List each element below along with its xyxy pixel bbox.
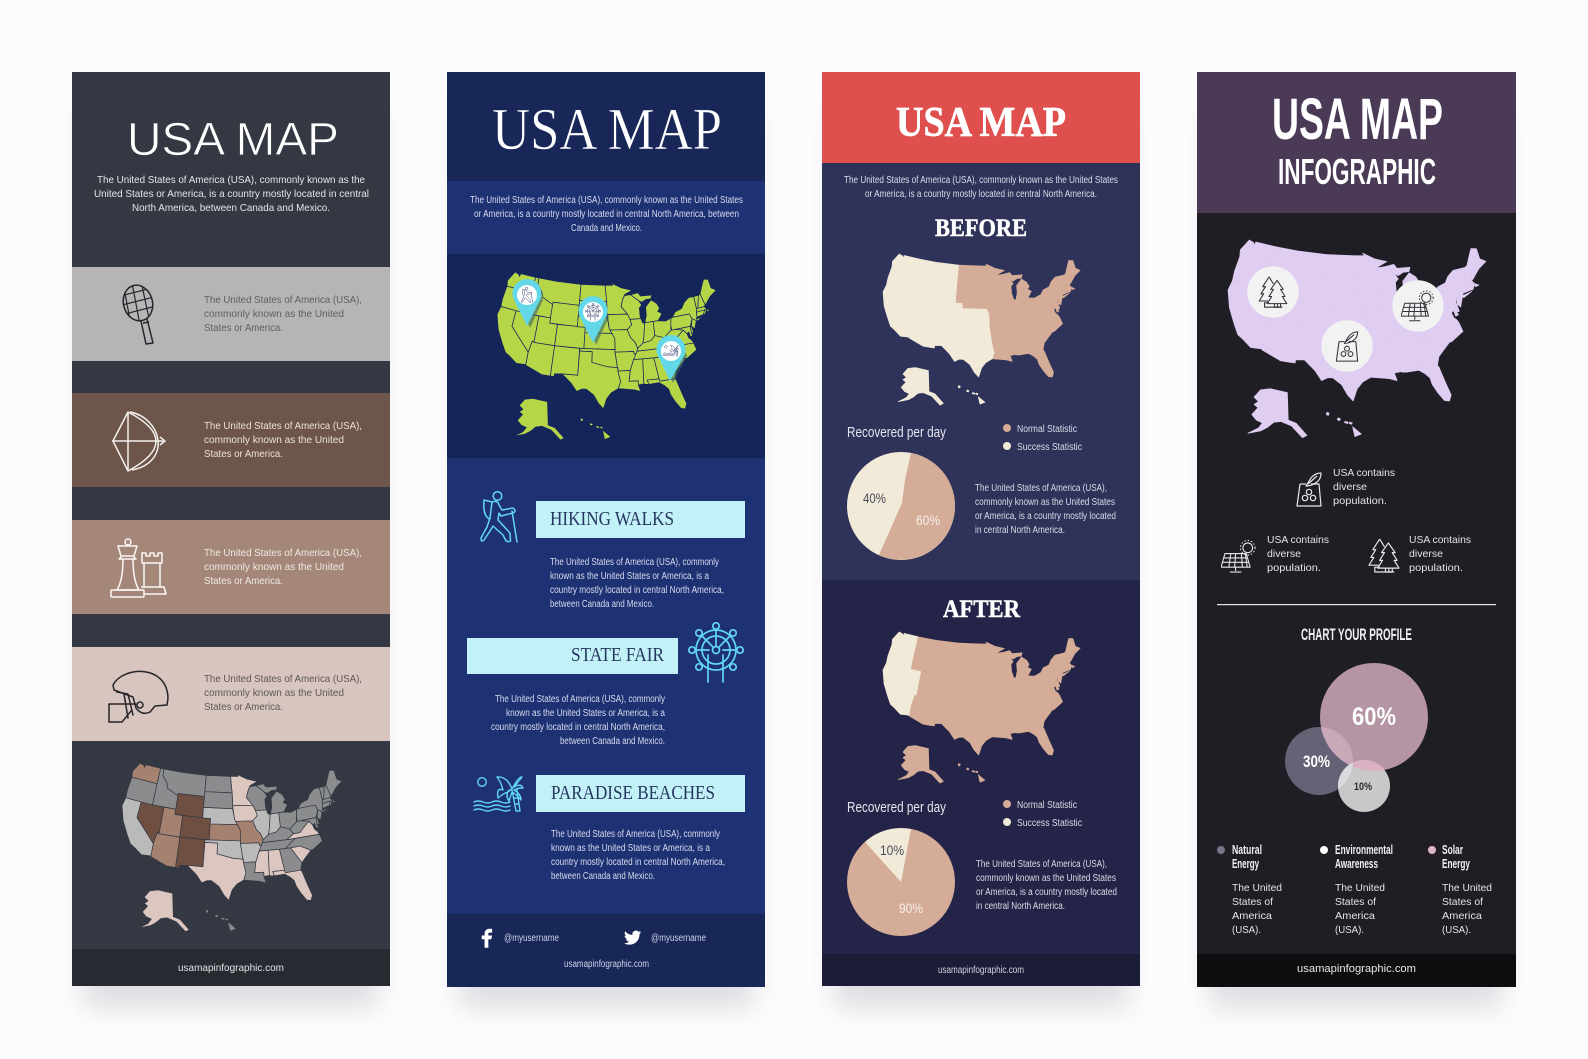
banner: [467, 638, 678, 674]
legend: Normal Statistic: [1017, 800, 1077, 811]
bubble chart: 60%: [1352, 703, 1396, 731]
row text: States or America.: [204, 322, 283, 334]
legend: solar energy: Energy: [1442, 857, 1470, 871]
row text: [204, 547, 362, 587]
body text: commonly known as the United States: [975, 497, 1115, 508]
map marker: trees: [1247, 266, 1299, 318]
icon: palm beach: [474, 777, 523, 811]
map marker: factory: [1321, 320, 1373, 372]
footer: [72, 949, 390, 986]
website: usamapinfographic.com: [564, 959, 649, 970]
body text: The United States of America (USA), commonly: [495, 694, 665, 705]
panel: navy travel infographic: [447, 72, 765, 987]
footer: usamapinfographic.com: [178, 962, 284, 974]
legend: environmental awareness: (USA).: [1335, 924, 1364, 936]
legend: environmental awareness: States of: [1335, 896, 1376, 908]
pie chart: after: 10%: [880, 842, 904, 858]
panel: energy infographic: [1197, 72, 1516, 987]
body text: between Canada and Mexico.: [551, 871, 655, 882]
title band: USA MAP: [1272, 87, 1443, 152]
heading: chart your profile: CHART YOUR PROFILE: [1301, 626, 1412, 644]
legend: environmental awareness: Environmental: [1335, 843, 1393, 857]
fact: trees: USA contains: [1409, 534, 1471, 546]
map: after: [883, 632, 1080, 783]
row: tennis: [72, 267, 390, 361]
map pin: state fair: [578, 296, 609, 345]
twitter handle: @myusername: [651, 933, 706, 944]
chart title: Recovered per day: [847, 424, 946, 441]
banner: STATE FAIR: [571, 644, 665, 666]
fact: trees: diverse: [1409, 548, 1443, 560]
legend: [1003, 424, 1082, 453]
icon: facebook: [482, 929, 492, 948]
row text: The United States of America (USA),: [204, 420, 362, 432]
body text: [550, 557, 724, 610]
pie chart: after: 90%: [899, 900, 923, 916]
intro text: or America, is a country mostly located in central North America, between: [474, 209, 739, 220]
body text: country mostly located in central North America,: [491, 722, 665, 733]
map: lilac: [1228, 240, 1486, 438]
row text: commonly known as the United: [204, 561, 344, 573]
title band: [1197, 72, 1516, 213]
legend: Success Statistic: [1017, 818, 1082, 829]
body text: known as the United States or America, is a: [551, 843, 710, 854]
icon: hiker: [481, 492, 517, 542]
map pin: hiking: [512, 279, 543, 328]
after section: [822, 580, 1140, 954]
legend: natural energy: Energy: [1232, 857, 1259, 871]
legend: environmental awareness: Awareness: [1335, 857, 1378, 871]
legend: natural energy: Natural: [1232, 843, 1262, 857]
body text: or America, is a country mostly located: [975, 511, 1116, 522]
fact: factory: diverse: [1333, 481, 1367, 493]
body text: between Canada and Mexico.: [560, 736, 665, 747]
heading: before: BEFORE: [935, 215, 1027, 242]
intro text: United States or America, is a country mostly located in central: [94, 188, 369, 200]
intro text: [94, 174, 369, 214]
body text: in central North America.: [975, 525, 1065, 536]
body text: commonly known as the United States: [976, 873, 1116, 884]
map pin: beaches: [656, 335, 687, 383]
row text: [204, 673, 362, 713]
fact: solar: population.: [1267, 562, 1321, 574]
panel shadows: [84, 110, 1503, 1008]
intro text: or America, is a country mostly located in central North America.: [865, 189, 1097, 200]
body text: known as the United States or America, is a: [506, 708, 665, 719]
panel: slate sports infographic: [72, 72, 390, 986]
bubble chart: [1285, 663, 1428, 812]
body text: or America, is a country mostly located: [976, 887, 1117, 898]
fact: solar: [1221, 534, 1329, 574]
row text: commonly known as the United: [204, 434, 344, 446]
legend: [1003, 800, 1082, 829]
body text: The United States of America (USA),: [976, 859, 1107, 870]
map marker: solar: [1392, 280, 1444, 332]
body text: known as the United States or America, is a: [550, 571, 709, 582]
body text: [975, 483, 1116, 536]
row text: [204, 294, 362, 334]
intro text: [470, 195, 743, 234]
pie chart: before: [847, 452, 955, 560]
body text: The United States of America (USA), commonly: [550, 557, 719, 568]
legend: solar energy: The United: [1442, 882, 1492, 894]
intro text: [844, 175, 1118, 200]
legend: solar energy: [1428, 843, 1492, 936]
heading: after: AFTER: [943, 596, 1021, 623]
bubble chart: 30%: [1303, 752, 1330, 771]
fact: solar: diverse: [1267, 548, 1301, 560]
banner: [536, 501, 745, 538]
pie chart: before: 60%: [916, 512, 940, 528]
legend: solar energy: America: [1442, 910, 1482, 922]
row: archery: [72, 393, 390, 487]
row text: [204, 420, 362, 460]
footer: usamapinfographic.com: [1297, 963, 1416, 975]
fact: trees: population.: [1409, 562, 1463, 574]
icon: ferris wheel: [689, 623, 743, 682]
map: before: [883, 254, 1080, 405]
title band: [822, 72, 1140, 163]
legend: solar energy: States of: [1442, 896, 1483, 908]
row: football: [72, 647, 390, 741]
legend: environmental awareness: The United: [1335, 882, 1385, 894]
icon: football helmet: [109, 671, 168, 722]
section: state fair: [467, 623, 743, 747]
icon: bow and arrow: [112, 412, 165, 471]
legend: natural energy: The United: [1232, 882, 1282, 894]
banner: PARADISE BEACHES: [551, 782, 715, 804]
legend: Success Statistic: [1017, 442, 1082, 453]
fact: trees: [1369, 534, 1471, 574]
row text: States or America.: [204, 448, 283, 460]
panel: before and after infographic: [822, 72, 1140, 986]
section: paradise beaches: [474, 775, 745, 882]
body text: [551, 829, 725, 882]
row: chess: [72, 520, 390, 614]
row text: States or America.: [204, 575, 283, 587]
footer: [1197, 954, 1516, 987]
legend: environmental awareness: America: [1335, 910, 1375, 922]
fact: factory: population.: [1333, 495, 1387, 507]
row text: The United States of America (USA),: [204, 547, 362, 559]
legend: Normal Statistic: [1017, 424, 1077, 435]
intro text: Canada and Mexico.: [571, 223, 642, 234]
legend: natural energy: [1217, 843, 1282, 936]
map section: [447, 254, 765, 458]
fact: solar: USA contains: [1267, 534, 1329, 546]
body text: in central North America.: [976, 901, 1065, 912]
row text: The United States of America (USA),: [204, 673, 362, 685]
legend: natural energy: States of: [1232, 896, 1273, 908]
icon: twitter: [624, 931, 641, 945]
legend: natural energy: America: [1232, 910, 1272, 922]
legend: solar energy: (USA).: [1442, 924, 1471, 936]
pie chart: before: 40%: [863, 490, 886, 506]
intro text: The United States of America (USA), commonly known as the United States: [844, 175, 1118, 186]
body text: The United States of America (USA),: [975, 483, 1107, 494]
row text: States or America.: [204, 701, 283, 713]
intro text: The United States of America (USA), commonly known as the: [97, 174, 365, 186]
title band: [447, 72, 765, 181]
facebook handle: @myusername: [504, 933, 559, 944]
body text: [491, 694, 665, 747]
intro text: The United States of America (USA), commonly known as the United States: [470, 195, 743, 206]
footer: [822, 954, 1140, 986]
legend: environmental awareness: [1320, 843, 1393, 936]
row text: commonly known as the United: [204, 687, 344, 699]
title band: USA MAP: [492, 96, 722, 162]
body text: between Canada and Mexico.: [550, 599, 654, 610]
chart title: Recovered per day: [847, 799, 946, 816]
body text: The United States of America (USA), commonly: [551, 829, 720, 840]
legend: natural energy: (USA).: [1232, 924, 1261, 936]
footer: usamapinfographic.com: [938, 965, 1024, 976]
body text: country mostly located in central North America,: [550, 585, 724, 596]
pie chart: after: [847, 828, 955, 936]
map: colored states: [122, 763, 342, 932]
body text: [976, 859, 1117, 912]
title band: USA MAP: [896, 100, 1066, 146]
footer: [447, 914, 765, 987]
body text: country mostly located in central North America,: [551, 857, 725, 868]
title band: INFOGRAPHIC: [1278, 151, 1436, 192]
fact: factory: USA contains: [1333, 467, 1395, 479]
icon: chess pieces: [111, 539, 166, 597]
bubble chart: 10%: [1354, 781, 1372, 793]
legend: solar energy: Solar: [1442, 843, 1463, 857]
banner: HIKING WALKS: [550, 508, 674, 530]
icon: tennis racket: [122, 284, 154, 345]
section: hiking walks: [481, 492, 745, 610]
row text: The United States of America (USA),: [204, 294, 362, 306]
intro text: North America, between Canada and Mexico.: [132, 202, 330, 214]
title: USA MAP: [127, 113, 339, 165]
map: green states: [497, 272, 716, 440]
banner: [536, 775, 745, 812]
row text: commonly known as the United: [204, 308, 344, 320]
fact: factory: [1297, 467, 1395, 507]
